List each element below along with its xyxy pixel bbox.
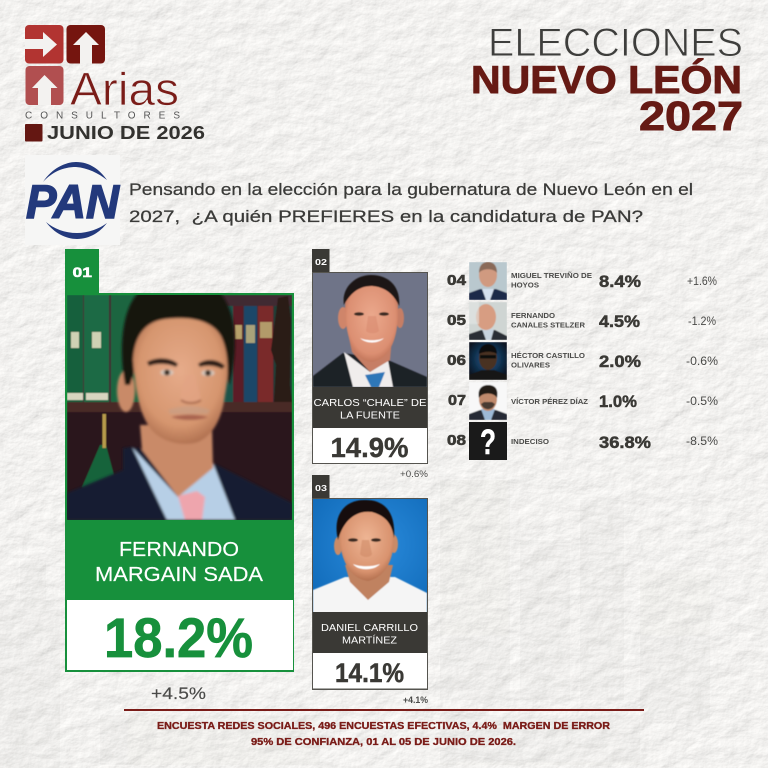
row: undecided 08: -8.5%: [686, 436, 718, 448]
change label: +4.1%: [403, 695, 428, 705]
rank tab 02: [312, 249, 330, 274]
row: candidate 05: [447, 302, 716, 340]
percentage box: [313, 653, 427, 688]
date marker square: [25, 124, 42, 142]
row: candidate 07: 1.0%: [599, 393, 637, 411]
row: candidate 07: 07: [448, 393, 466, 409]
logo wordmark: Arias: Arias: [70, 63, 179, 115]
question text: Pensando en la elección para la gubernatura de Nuevo León en el: [129, 180, 693, 199]
title line: Nuevo León: NUEVO LEÓN: [471, 58, 742, 102]
percentage box: [313, 428, 427, 463]
footer methodology note: ENCUESTA REDES SOCIALES, 496 ENCUESTAS EFECTIVAS, 4.4% MARGEN DE ERROR: [157, 720, 610, 732]
photo: Héctor Castillo: [469, 342, 507, 380]
percentage box: 18.2%: [104, 606, 253, 669]
rank tab 01: [65, 249, 99, 295]
row: candidate 06: -0.6%: [686, 356, 718, 368]
row: undecided 08: 36.8%: [599, 434, 651, 452]
card frame: [312, 272, 428, 464]
name band: [313, 612, 427, 653]
shirt: [313, 577, 427, 613]
shirt: [132, 447, 235, 520]
PAN party logo: PAN: [26, 175, 120, 228]
mouth: [171, 415, 208, 420]
row: candidate 04: +1.6%: [687, 276, 717, 288]
suit: [67, 447, 292, 520]
icon: dark arrow-up square: [66, 25, 105, 64]
photo: Fernando Canales: [469, 302, 507, 340]
row: candidate 05: 05: [447, 313, 466, 329]
name band: FERNANDO: [119, 539, 239, 561]
ears: [117, 370, 135, 412]
neck: [349, 338, 392, 372]
change label: +0.6%: [400, 469, 429, 480]
hair: [122, 282, 235, 385]
percentage box: 14.1%: [335, 658, 404, 688]
row: candidate 05: -1.2%: [688, 316, 716, 328]
photo: Miguel Treviño: [469, 262, 507, 300]
name band: [67, 520, 292, 600]
footer methodology note: [124, 709, 644, 748]
row: candidate 06: 06: [447, 353, 466, 369]
row: candidate 06: [447, 342, 718, 380]
card frame: [312, 498, 428, 690]
face: [339, 508, 394, 581]
name band: MARTÍNEZ: [342, 634, 397, 646]
row: candidate 04: 04: [447, 273, 466, 289]
PAN party logo: [25, 155, 120, 245]
row: candidate 07: VÍCTOR PÉREZ DÍAZ: [511, 397, 588, 406]
ears: [338, 307, 348, 329]
shirt: [344, 352, 393, 387]
logo: Arias Consultores: [25, 25, 205, 143]
row: candidate 07: -0.5%: [686, 396, 718, 408]
photo: Fernando Margain Sada: [67, 282, 292, 520]
title line: Elecciones: ELECCIONES: [488, 21, 743, 65]
hair: [344, 275, 399, 306]
title line: 2027: 2027: [639, 93, 743, 139]
row: candidate 07: [448, 382, 718, 420]
icon: question mark: ?: [480, 423, 496, 462]
neck: [345, 565, 393, 600]
tie: [178, 491, 205, 520]
hair: [337, 500, 394, 540]
rank tab 03: 03: [315, 483, 327, 493]
card frame: [65, 293, 294, 672]
name band: CARLOS “CHALE” DE: [314, 398, 427, 409]
rank tab 01: 01: [72, 264, 92, 280]
eyes: [160, 369, 174, 376]
row: candidate 05: 4.5%: [599, 313, 640, 331]
percentage box: 14.9%: [330, 432, 409, 463]
face: [133, 318, 228, 444]
row: candidate 04: [447, 262, 717, 300]
name band: MARGAIN SADA: [95, 564, 264, 586]
icon: light red arrow-up square: [26, 66, 64, 105]
name band: LA FUENTE: [340, 410, 400, 422]
neck: [140, 425, 213, 497]
face: [345, 280, 398, 362]
row: candidate 06: OLIVARES: [511, 360, 550, 370]
row: candidate 06: HÉCTOR CASTILLO: [511, 351, 585, 360]
row: undecided 08: INDECISO: [511, 437, 549, 446]
row: candidate 05: CANALES STELZER: [511, 320, 586, 330]
photo: Víctor Pérez: [469, 382, 507, 420]
percentage box: [67, 600, 293, 670]
suit: [313, 353, 427, 387]
row: candidate 04: 8.4%: [599, 273, 641, 291]
rank tab 02: 02: [315, 257, 327, 267]
brows: [147, 358, 178, 367]
photo: Daniel Carrillo Martínez: [313, 499, 427, 613]
name band: DANIEL CARRILLO: [321, 623, 418, 634]
panel: candidate 02: [312, 249, 429, 480]
icon: red arrow-right square: [25, 25, 64, 64]
row: candidate 06: 2.0%: [599, 353, 641, 371]
row: undecided 08: 08: [447, 433, 466, 449]
panel: candidate 01: [65, 249, 294, 703]
row: undecided 08: [447, 422, 718, 462]
footer methodology note: 95% DE CONFIANZA, 01 AL 05 DE JUNIO DE 2026.: [251, 736, 516, 748]
change label: +4.5%: [151, 684, 206, 703]
row: candidate 04: HOYOS: [511, 280, 539, 290]
question text: 2027, ¿A quién PREFIERES en la candidatura de PAN?: [129, 207, 643, 226]
question text: [129, 180, 693, 226]
nose: [196, 397, 198, 400]
date label: JUNIO DE 2026: [47, 123, 205, 143]
name band: [313, 387, 427, 428]
photo: Carlos Chale de la Fuente: [313, 273, 427, 387]
ears: [334, 537, 342, 555]
logo subtitle: Consultores: CONSULTORES: [25, 110, 180, 122]
icon: question mark: [469, 422, 507, 462]
title: [471, 21, 743, 139]
row: candidate 04: MIGUEL TREVIÑO DE: [511, 271, 592, 280]
rank tab 03: [312, 475, 330, 500]
row: candidate 05: FERNANDO: [511, 311, 555, 320]
panel: candidate 03: [312, 475, 428, 705]
